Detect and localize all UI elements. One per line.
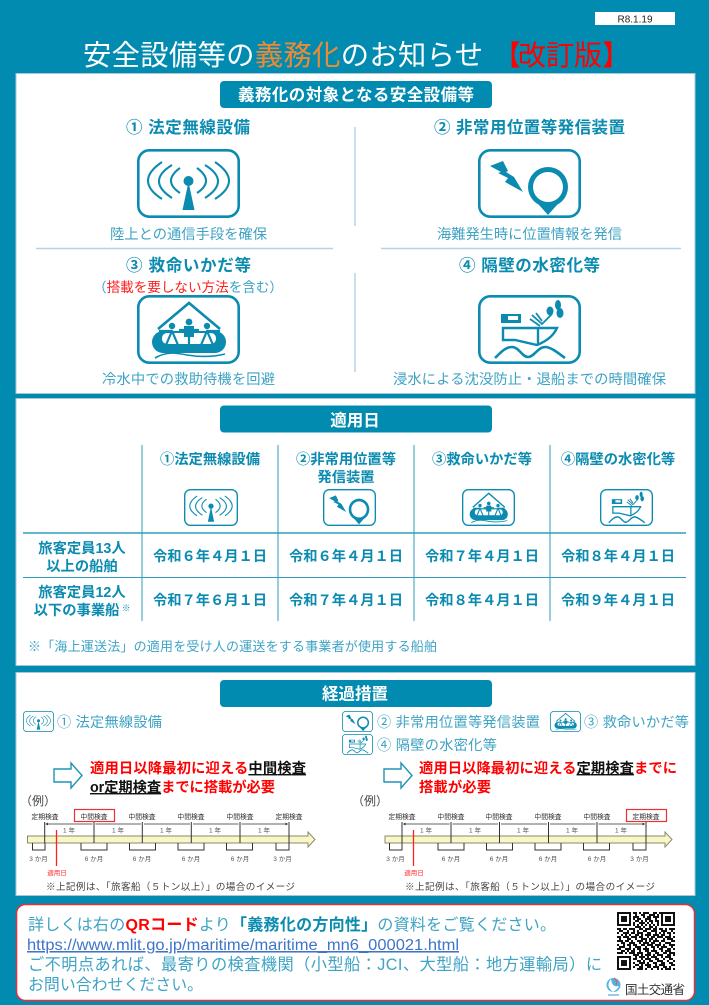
item 3: life rafts: 冷水中での救助待機を回避 [102, 371, 275, 388]
timeline: left example: 中間検査 [80, 812, 108, 821]
legend: equipment 2 [342, 711, 540, 732]
row 2: 12 or fewer passengers: 令和９年４月１日 [561, 591, 675, 609]
timeline: right example: 適用日 [404, 868, 424, 877]
timeline: left example: 定期検査 [275, 812, 303, 821]
column headers [160, 450, 675, 486]
ministry logo and name [606, 978, 685, 997]
row 1: 13 or more passengers [38, 539, 675, 575]
item 4: watertight bulkheads: 浸水による沈没防止・退船までの時間確保 [393, 371, 667, 388]
column headers: ①法定無線設備 [160, 451, 260, 468]
table grid [23, 445, 686, 621]
timeline: left example: 6 か月 [182, 855, 200, 863]
revision date label [595, 12, 675, 26]
timeline: left example: 1 年 [160, 826, 172, 834]
item 4: watertight bulkheads [393, 255, 667, 388]
heading: transitional measures: 経過措置 [322, 684, 388, 704]
title: 【改訂版】 [493, 40, 630, 71]
timeline: right example: 1 年 [469, 826, 481, 834]
timeline: right example: ※上記例は、「旅客船（５トン以上）」の場合のイメージ [405, 881, 655, 893]
timeline: right example: 3 か月 [386, 855, 405, 863]
row 1: 13 or more passengers: 旅客定員13人 [38, 539, 126, 557]
heading: target equipment: 義務化の対象となる安全設備等 [238, 84, 474, 104]
item 2: emergency position beacon [434, 117, 625, 243]
row 2: 12 or fewer passengers: 令和８年４月１日 [425, 591, 539, 609]
row 1: 13 or more passengers: 令和６年４月１日 [153, 547, 267, 565]
left rule text: 適用日以降最初に迎える中間検査 [90, 759, 306, 777]
footnote: ※「海上運送法」の適用を受け人の運送をする事業者が使用する船舶 [28, 639, 437, 654]
arrow: right rule [384, 763, 412, 788]
row 2: 12 or fewer passengers: ※ [119, 603, 130, 613]
timeline: left example: （例） [20, 794, 56, 808]
heading: application dates [220, 406, 492, 432]
timeline: left example [20, 794, 315, 893]
timeline: right example: 中間検査 [485, 812, 513, 821]
row 2: 12 or fewer passengers: 旅客定員12人 [38, 583, 126, 601]
legend: equipment 4 [342, 734, 497, 755]
row 2: 12 or fewer passengers: 令和７年４月１日 [289, 591, 403, 609]
dividers [36, 127, 681, 372]
timeline: right example: 定期検査 [388, 812, 416, 821]
row 2: 12 or fewer passengers: 令和７年６月１日 [153, 591, 267, 609]
item 2: emergency position beacon: ② 非常用位置等発信装置 [434, 117, 625, 137]
arrow: left rule [54, 763, 82, 788]
panel: target safety equipment [16, 74, 695, 394]
legend: equipment 3: ③ 救命いかだ等 [584, 714, 689, 731]
timeline: right example: 中間検査 [437, 812, 465, 821]
item 3: life rafts: ③ 救命いかだ等 [126, 255, 251, 275]
contact text: 詳しくは右のQRコードより「義務化の方向性」の資料をご覧ください。 [28, 915, 556, 934]
panel: application dates [16, 398, 695, 666]
timeline: left example: 1 年 [209, 826, 221, 834]
row 2: 12 or fewer passengers [34, 583, 675, 619]
contact text: ご不明点あれば、最寄りの検査機関（小型船：JCI、大型船：地方運輸局）に [28, 956, 602, 974]
row 1: 13 or more passengers: 令和８年４月１日 [561, 547, 675, 565]
timeline: left example: 1 年 [63, 826, 75, 834]
timeline: left example: 6 か月 [85, 855, 103, 863]
timeline: right example: 3 か月 [630, 855, 649, 863]
row 1: 13 or more passengers: 令和６年４月１日 [289, 547, 403, 565]
row 1: 13 or more passengers: 令和７年４月１日 [425, 547, 539, 565]
timeline: left example: 中間検査 [177, 812, 205, 821]
timeline: right example: 6 か月 [539, 855, 557, 863]
column headers: 発信装置 [317, 468, 375, 486]
contact text: https://www.mlit.go.jp/maritime/maritime_mn6_000021.html [27, 937, 459, 954]
panel: transitional measures [16, 672, 695, 896]
timeline: left example: 中間検査 [128, 812, 156, 821]
item 1: statutory radio equipment: ① 法定無線設備 [126, 118, 250, 137]
timeline: right example: 6 か月 [442, 855, 460, 863]
timeline: left example: 3 か月 [273, 855, 292, 863]
legend: equipment 3 [550, 711, 689, 732]
timeline: left example: 中間検査 [226, 812, 254, 821]
timeline: left example: 3 か月 [29, 855, 48, 863]
item 3: life rafts: （搭載を要しない方法を含む） [93, 279, 283, 295]
item 3: life rafts [93, 255, 283, 388]
timeline: right example: 1 年 [420, 826, 432, 834]
heading: application dates: 適用日 [330, 411, 380, 430]
ministry logo and name: 国土交通省 [625, 983, 685, 997]
timeline: right example: 中間検査 [583, 812, 611, 821]
right rule text: 搭載が必要 [419, 778, 491, 796]
contact text: お問い合わせください。 [28, 976, 203, 994]
timeline: left example: 6 か月 [133, 855, 151, 863]
column headers: ②非常用位置等 [296, 450, 396, 468]
column headers: ③救命いかだ等 [432, 450, 532, 468]
title: 安全設備等の義務化のお知らせ [83, 39, 483, 71]
item 4: watertight bulkheads: ④ 隔壁の水密化等 [459, 255, 600, 275]
legend: equipment 1: ① 法定無線設備 [57, 715, 162, 731]
right rule text: 適用日以降最初に迎える定期検査までに [419, 759, 677, 777]
legend: equipment 2: ② 非常用位置等発信装置 [377, 714, 540, 731]
legend: equipment 4: ④ 隔壁の水密化等 [377, 737, 497, 754]
timeline: right example: 定期検査 [632, 812, 660, 821]
legend: equipment 1 [23, 711, 162, 732]
timeline: right example [352, 794, 672, 893]
timeline: right example: （例） [352, 794, 388, 808]
right rule text [419, 759, 677, 796]
timeline: left example: 6 か月 [231, 855, 249, 863]
timeline: right example: 1 年 [517, 826, 529, 834]
timeline: right example: 6 か月 [490, 855, 508, 863]
row 2: 12 or fewer passengers: 以下の事業船 [34, 603, 119, 619]
column icons [185, 490, 652, 525]
item 1: statutory radio equipment: 陸上との通信手段を確保 [110, 226, 268, 243]
row 1: 13 or more passengers: 以上の船舶 [46, 557, 118, 575]
panel: contact information [16, 904, 694, 1000]
timeline: right example: 6 か月 [588, 855, 606, 863]
column headers: ④隔壁の水密化等 [561, 450, 675, 468]
item 2: emergency position beacon: 海難発生時に位置情報を発信 [437, 226, 622, 243]
left rule text [90, 759, 306, 796]
heading: target equipment [220, 81, 492, 108]
timeline: left example: 1 年 [258, 826, 270, 834]
timeline: left example: ※上記例は、「旅客船（５トン以上）」の場合のイメージ [46, 881, 295, 893]
timeline: right example: 中間検査 [534, 812, 562, 821]
QR code [616, 911, 676, 971]
timeline: left example: 1 年 [112, 826, 124, 834]
timeline: left example: 適用日 [47, 868, 67, 877]
timeline: left example: 定期検査 [31, 812, 59, 821]
revision date label: R8.1.19 [617, 14, 653, 26]
timeline: right example: 1 年 [615, 826, 627, 834]
left rule text: or定期検査までに搭載が必要 [90, 778, 275, 796]
item 1: statutory radio equipment [110, 118, 268, 243]
contact text [27, 915, 602, 994]
heading: transitional measures [220, 680, 492, 707]
timeline: right example: 1 年 [566, 826, 578, 834]
